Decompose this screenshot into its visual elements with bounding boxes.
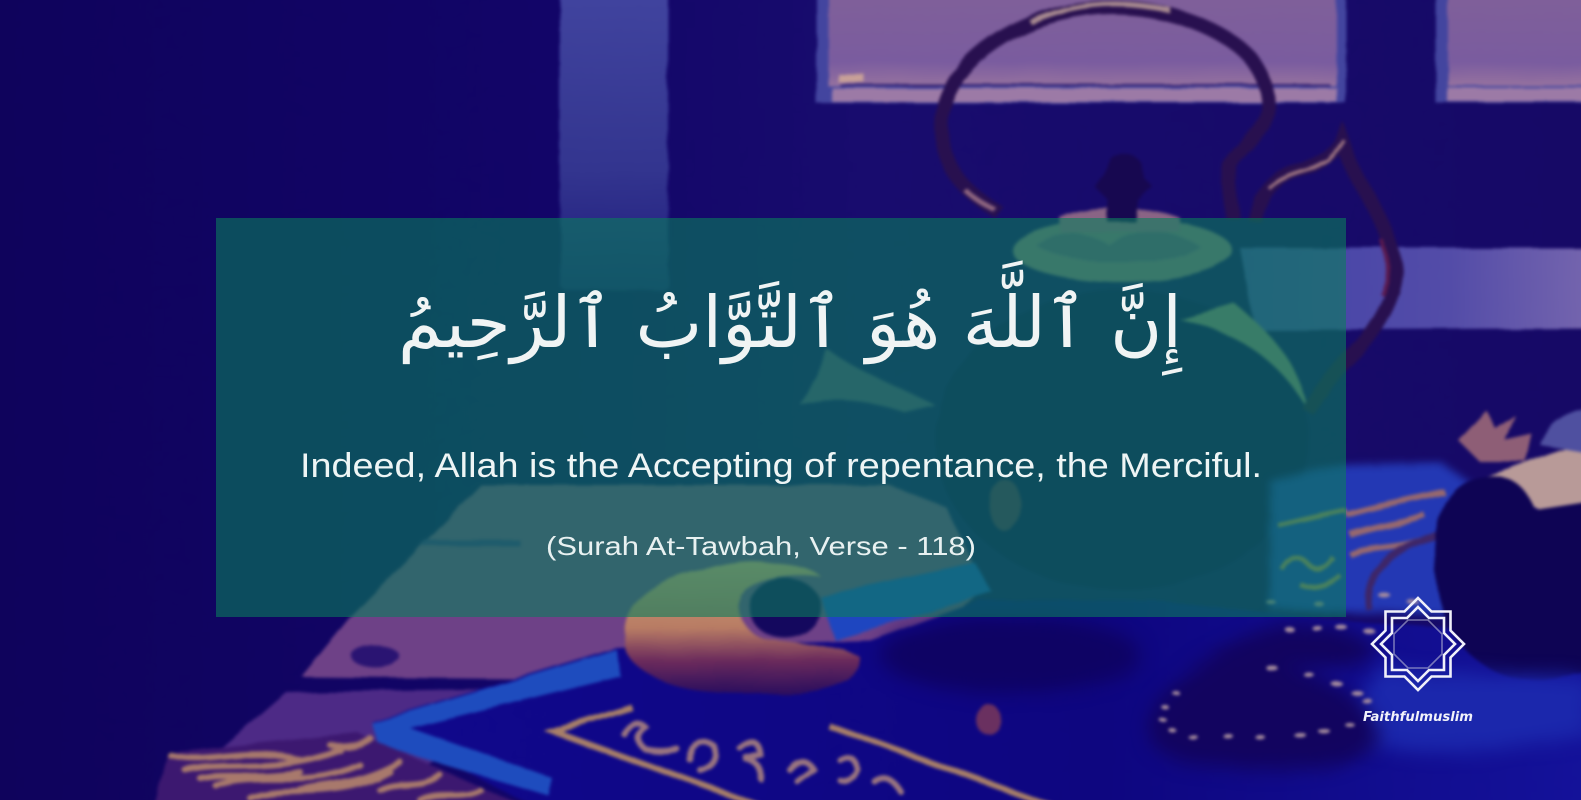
translucent teal panel xyxy=(216,218,1346,617)
teapot shoulder highlight xyxy=(1180,304,1308,410)
teapot left highlight xyxy=(800,350,935,412)
lid knob xyxy=(1094,154,1152,222)
teapot body xyxy=(935,290,1309,590)
panel side calligraphy xyxy=(1278,510,1346,587)
fringe threads xyxy=(170,738,480,800)
bead highlights xyxy=(1159,594,1418,740)
left window pane xyxy=(816,0,1346,103)
teapot glow xyxy=(989,479,1021,531)
orange brush strokes xyxy=(1346,492,1445,555)
table gap xyxy=(420,540,520,546)
lantern ring xyxy=(1369,532,1468,610)
handle highlight xyxy=(1030,4,1170,22)
handle lower highlight xyxy=(965,190,995,210)
prayer mat xyxy=(372,600,1581,800)
logo: eight-pointed star xyxy=(1372,598,1464,690)
arabic verse: إِنَّ ٱللَّهَ هُوَ ٱلتَّوَّابُ ٱلرَّحِيمُ xyxy=(398,259,1182,376)
table knot xyxy=(351,645,399,667)
bead shadow xyxy=(1147,624,1378,770)
right blue mat xyxy=(1270,462,1480,615)
lid shadow xyxy=(1035,232,1200,262)
crumb on mat xyxy=(975,704,1001,734)
hole shading xyxy=(749,578,821,638)
spout highlight xyxy=(1268,140,1344,188)
gold mat border xyxy=(553,707,1052,800)
lid dome top xyxy=(1060,208,1180,232)
spout lower sheen xyxy=(1382,240,1388,295)
mat bright border xyxy=(372,650,620,795)
column xyxy=(560,0,668,290)
mat blue patch behind panel xyxy=(820,563,992,640)
mat calligraphy xyxy=(625,722,901,792)
window sill band xyxy=(1240,248,1581,330)
orange tuft xyxy=(1458,410,1532,462)
crescent bread xyxy=(624,561,861,694)
right window pane xyxy=(1436,0,1581,103)
teapot spout xyxy=(1255,140,1396,412)
lantern cream band xyxy=(1480,440,1581,510)
table top xyxy=(302,485,986,680)
dark mat shade xyxy=(880,617,1140,693)
lantern body xyxy=(1435,476,1581,680)
blue mat lower right xyxy=(1340,665,1581,752)
english translation: Indeed, Allah is the Accepting of repentance, the Merciful. xyxy=(300,447,1262,485)
lid xyxy=(1012,218,1232,282)
fringe backing xyxy=(154,733,533,800)
lower table plank xyxy=(217,688,570,790)
brand name: Faithfulmuslim xyxy=(1363,710,1473,725)
verse citation: (Surah At-Tawbah, Verse - 118) xyxy=(546,531,976,561)
kettle handle xyxy=(941,7,1268,218)
lantern top xyxy=(1540,405,1581,455)
